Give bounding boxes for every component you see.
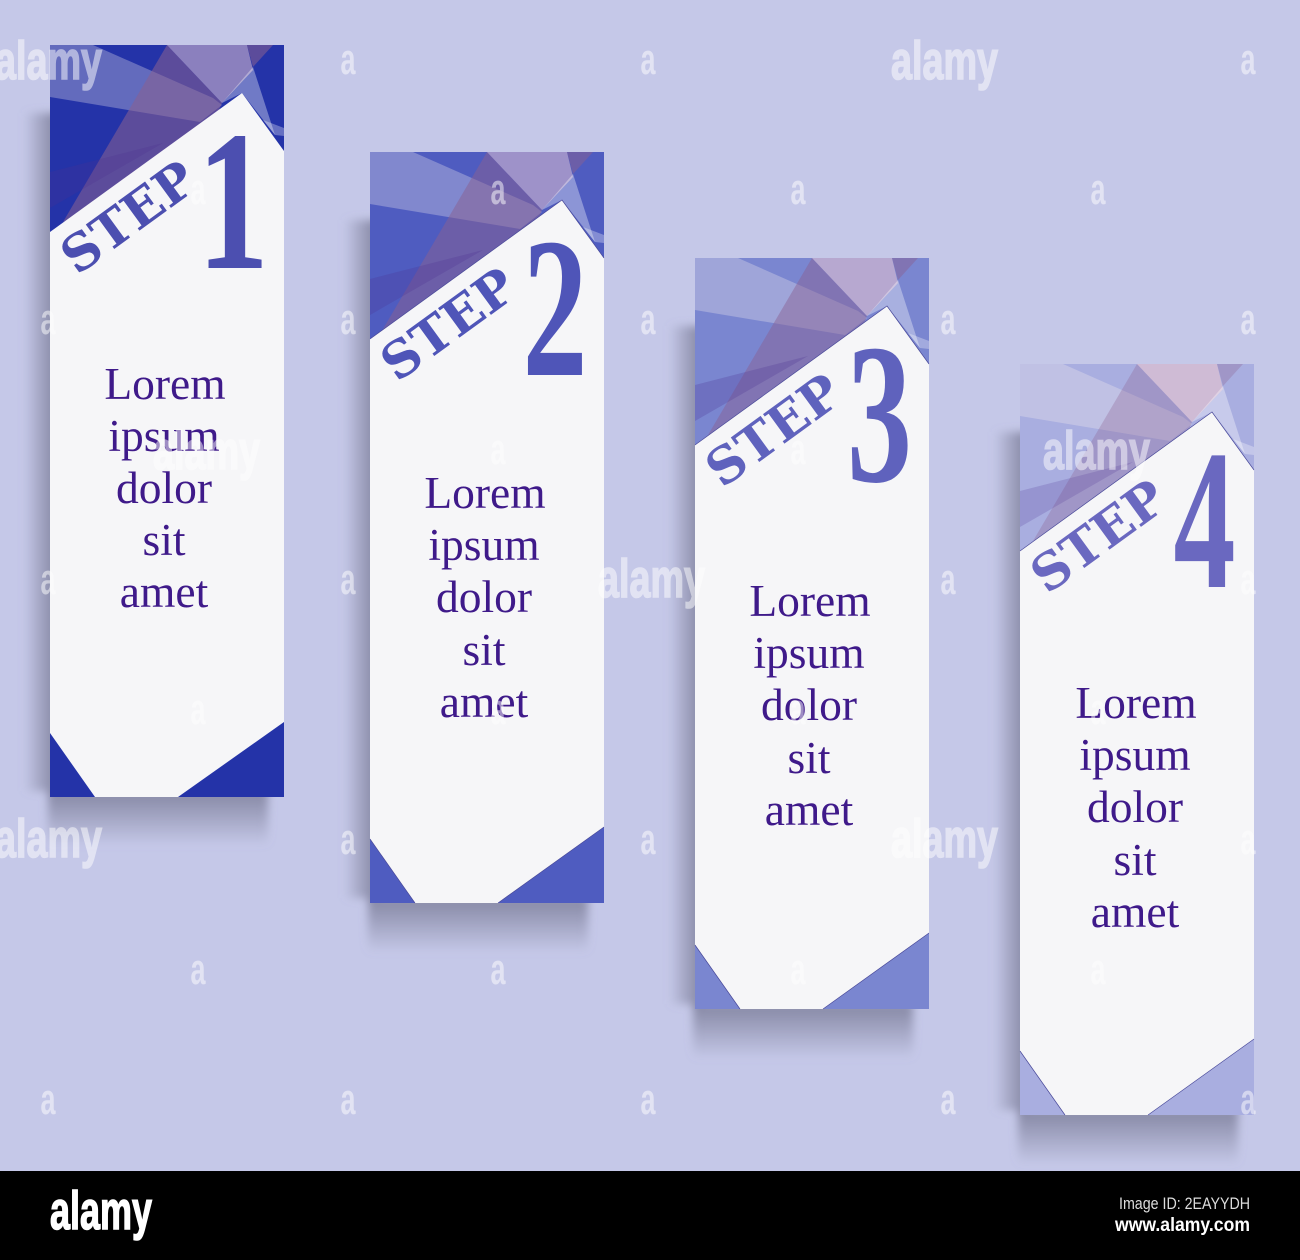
text block: step 3: amet (765, 784, 854, 835)
watermarks: alamy (891, 809, 998, 869)
panel: step 3 card: 3 (847, 304, 912, 525)
text block: step 3 (749, 575, 871, 835)
panel: step 2 card: 2 (523, 198, 587, 419)
watermarks: a (940, 1075, 956, 1124)
watermarks: a (1240, 555, 1256, 604)
text block: step 2 (424, 467, 546, 727)
text block: step 4: ipsum (1079, 729, 1191, 780)
watermarks: a (490, 945, 506, 994)
text block: step 4: Lorem (1075, 677, 1197, 728)
watermarks: alamy (891, 31, 998, 91)
watermarks: a (790, 685, 806, 734)
watermarks: a (790, 425, 806, 474)
watermarks: a (640, 1075, 656, 1124)
text block: step 2: ipsum (428, 519, 540, 570)
text block: step 3: Lorem (749, 575, 871, 626)
text block: step 4: amet (1091, 886, 1180, 937)
panel: step 3 card: STEP (694, 362, 852, 499)
panel: step 1 card: 1 (197, 90, 269, 312)
text block: step 2: sit (462, 624, 506, 675)
panel: step 2 card (344, 152, 604, 953)
watermarks: a (1240, 35, 1256, 84)
panel: step 1 card: STEP (49, 149, 207, 286)
panel: step 2 card: STEP (369, 256, 527, 393)
watermarks: a (640, 295, 656, 344)
watermarks: a (340, 555, 356, 604)
panel: step 4 card: STEP (1019, 468, 1177, 605)
watermarks: a (940, 555, 956, 604)
panel: step 4 card: 4 (1174, 409, 1235, 630)
watermarks: a (790, 945, 806, 994)
panel: step 3 card (669, 258, 929, 1059)
footer bar: www.alamy.com (1114, 1215, 1250, 1236)
watermarks: a (190, 165, 206, 214)
watermarks: a (1240, 295, 1256, 344)
text block: step 1: amet (120, 566, 209, 617)
panel: step 4 card (994, 364, 1254, 1165)
watermarks: a (490, 165, 506, 214)
watermarks: a (190, 945, 206, 994)
text block: step 1 (104, 358, 226, 617)
watermarks: a (490, 685, 506, 734)
panel: step 1 card (24, 45, 284, 846)
watermarks: a (1240, 815, 1256, 864)
watermarks: a (490, 425, 506, 474)
watermarks: a (640, 35, 656, 84)
text block: step 2: dolor (436, 571, 532, 622)
watermarks: a (340, 295, 356, 344)
watermarks: a (40, 295, 56, 344)
watermarks: a (940, 295, 956, 344)
watermarks: a (640, 815, 656, 864)
text block: step 4: dolor (1087, 781, 1183, 832)
text block: step 3: dolor (761, 679, 857, 730)
watermarks: a (340, 815, 356, 864)
watermarks: a (190, 685, 206, 734)
watermarks: alamy (1043, 421, 1150, 481)
footer bar: Image ID: 2EAYYDH (1119, 1194, 1250, 1213)
watermarks: a (40, 555, 56, 604)
text block: step 1: Lorem (104, 358, 226, 409)
text block: step 1: dolor (116, 462, 212, 513)
watermarks: a (340, 1075, 356, 1124)
watermarks: a (40, 1075, 56, 1124)
text block: step 3: sit (788, 732, 831, 783)
watermarks: alamy (598, 549, 705, 609)
watermarks: a (1090, 685, 1106, 734)
watermarks: a (790, 165, 806, 214)
text block: step 4 (1075, 677, 1197, 937)
watermarks: a (1090, 945, 1106, 994)
text block: step 1: ipsum (108, 410, 220, 461)
footer bar: alamy (50, 1181, 152, 1241)
watermarks: a (1090, 165, 1106, 214)
watermarks: alamy (153, 421, 260, 481)
text block: step 4: sit (1114, 834, 1157, 885)
text block: step 1: sit (142, 514, 186, 565)
text block: step 2: amet (440, 676, 529, 727)
footer bar (0, 1171, 1300, 1260)
watermarks: a (340, 35, 356, 84)
text block: step 3: ipsum (753, 627, 865, 678)
watermarks: a (1240, 1075, 1256, 1124)
text block: step 2: Lorem (424, 467, 546, 518)
